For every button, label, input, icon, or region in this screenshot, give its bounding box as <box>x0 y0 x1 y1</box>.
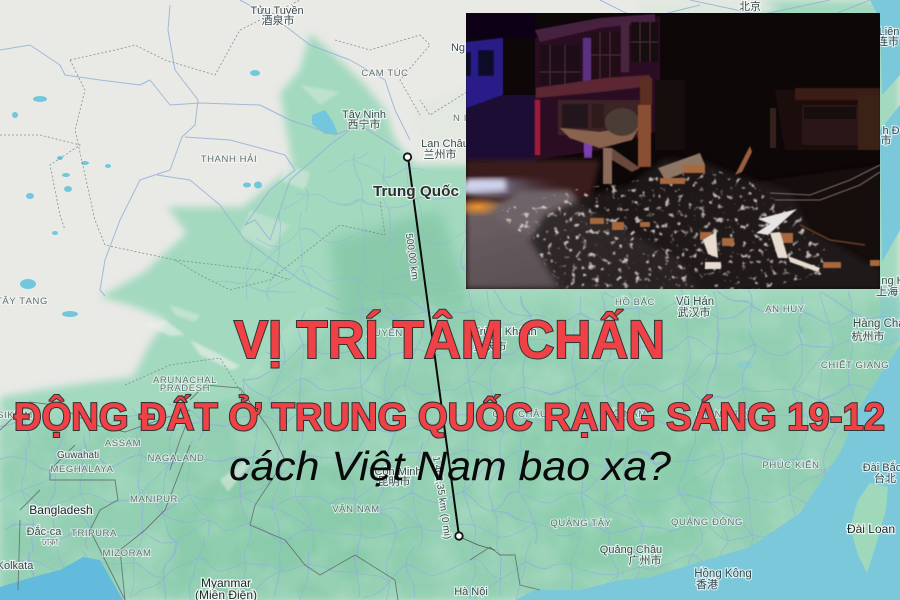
map labels: Trùng Khánh <box>473 326 537 338</box>
map labels: PHÚC KIẾN <box>762 460 820 471</box>
map labels: TRIPURA <box>71 528 117 539</box>
subtitle question: cách Việt Nam bao xa? <box>229 443 671 489</box>
map labels: Hồng Kông <box>694 568 752 580</box>
map labels: Côn Minh <box>374 466 422 478</box>
map labels: ASSAM <box>105 438 141 449</box>
map labels: GIANG TÂY <box>697 409 754 420</box>
map labels: PRADESH <box>160 383 210 394</box>
map labels: 兰州市 <box>424 147 456 161</box>
map: main road and river lines <box>0 0 870 300</box>
map: darker green southern terrain <box>0 210 900 600</box>
map: administrative borders <box>0 385 540 600</box>
photo: white metal sheet <box>756 209 797 235</box>
measurement line between epicentre and Vietnam <box>403 153 463 540</box>
map labels: MANIPUR <box>130 494 178 505</box>
map labels: Bangladesh <box>29 503 93 517</box>
map labels: Tây Ninh <box>342 109 386 121</box>
map labels: Myanmar <box>201 576 251 590</box>
map: dashed province borders <box>0 0 470 415</box>
map labels: 武汉市 <box>678 305 710 319</box>
map labels: QUẢNG TÂY <box>550 517 612 529</box>
map labels: 上海 <box>876 284 898 298</box>
title line 2: ĐỘNG ĐẤT Ở TRUNG QUỐC RẠNG SÁNG 19-12 <box>14 394 885 439</box>
photo: rubble speckle <box>495 165 840 289</box>
map: Taiwan island <box>850 483 888 573</box>
map: lakes <box>12 70 753 369</box>
map labels: 重庆市 <box>474 339 506 353</box>
map labels: ARUNACHAL <box>153 375 217 386</box>
map labels: HỒ NAM <box>605 408 647 420</box>
map labels: 西宁市 <box>348 117 380 131</box>
map labels: MIZORAM <box>102 548 152 559</box>
map: northern road mesh <box>200 150 470 300</box>
map labels: Tửu Tuyền <box>250 5 304 17</box>
map labels: AN HUY <box>765 304 805 315</box>
map labels: CHIẾT GIANG <box>821 360 889 371</box>
distance label 1402 km: 1 402,35 km (0 mi) <box>430 456 453 540</box>
country label: Trung Quốc: Trung Quốc <box>373 184 459 200</box>
map labels: Quảng Châu <box>600 544 662 556</box>
map labels: XUYÊN <box>367 328 403 339</box>
map labels: HỒ BẮC <box>615 296 655 308</box>
map labels: h Đ <box>882 125 900 137</box>
map labels: 台北 <box>874 471 896 485</box>
photo: rubble pile <box>495 146 880 289</box>
map labels: Ng <box>451 42 465 54</box>
map labels: 香港 <box>696 578 718 591</box>
map: light patches <box>145 85 340 492</box>
map labels: QUÝ CHÂU <box>493 409 547 420</box>
map labels: 酒泉市 <box>262 13 294 27</box>
map labels: 市 <box>880 133 892 147</box>
marker: epicentre <box>404 153 411 161</box>
photo: ground and dust <box>452 160 880 289</box>
map labels: Lan Châu <box>421 138 469 150</box>
map labels: ঢাকা <box>41 537 59 547</box>
map labels: 杭州市 <box>852 329 884 343</box>
map labels: NAGALAND <box>147 453 205 464</box>
map: terrain mottling <box>0 290 900 600</box>
map labels: MEGHALAYA <box>50 464 114 475</box>
map labels: N I <box>453 113 467 124</box>
map labels: Liên <box>879 26 899 38</box>
map labels: Guwahati <box>57 450 99 461</box>
map labels: 广州市 <box>628 553 662 567</box>
map: tiled road mesh <box>0 290 900 600</box>
map labels: Hà Nội <box>454 586 488 598</box>
distance label 500 km: 500,00 km <box>403 233 420 281</box>
photo: collapsed building at night <box>452 13 880 289</box>
map labels: 北京 <box>739 0 761 13</box>
map labels: THANH HẢI <box>201 153 257 165</box>
marker: Vietnam border point <box>455 532 463 540</box>
map labels: Đài Loan <box>847 522 895 536</box>
map labels: 连市 <box>877 34 899 48</box>
map labels: 昆明市 <box>378 474 410 488</box>
map labels: QUẢNG ĐÔNG <box>671 516 743 528</box>
map labels: VÂN NAM <box>332 504 380 515</box>
map labels: Vũ Hán <box>676 296 714 308</box>
title line 1: VỊ TRÍ TÂM CHẤN <box>234 309 665 370</box>
photo: building and lights <box>466 13 880 184</box>
map labels: Đắc-ca <box>27 525 62 538</box>
map labels: CAM TÚC <box>361 68 409 79</box>
